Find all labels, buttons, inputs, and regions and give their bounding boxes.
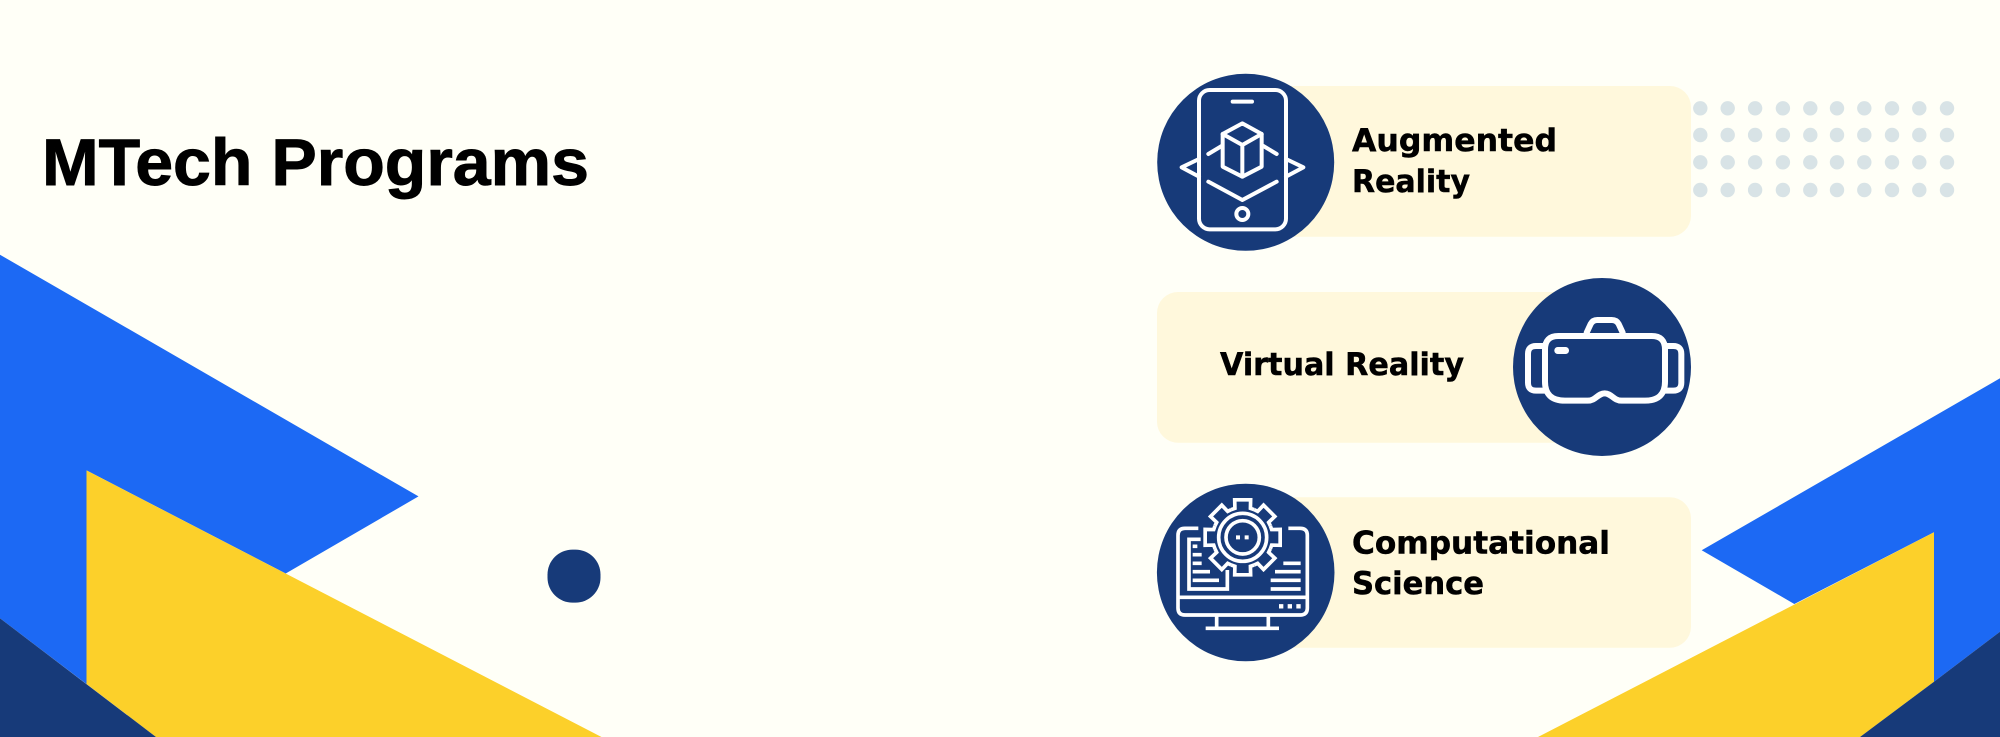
label: Augmented bbox=[1352, 123, 1557, 159]
card background bbox=[1157, 292, 1617, 443]
right geometric decoration bbox=[1538, 378, 2000, 737]
title: MTech Programs bbox=[42, 126, 589, 199]
card background bbox=[1245, 497, 1691, 648]
label: Computational bbox=[1352, 526, 1610, 562]
dot grid bbox=[1693, 101, 1954, 197]
panel: Virtual Reality bbox=[1157, 278, 1691, 456]
navy right corner bbox=[1860, 632, 2000, 737]
icon: VR headset bbox=[1528, 320, 1681, 401]
icon circle bbox=[1513, 278, 1691, 456]
navy left corner bbox=[0, 618, 156, 737]
yellow left triangle bbox=[86, 470, 602, 737]
panel: Augmented Reality bbox=[1157, 74, 1691, 251]
navy dot bbox=[548, 550, 600, 603]
icon circle bbox=[1157, 74, 1334, 251]
icon: monitor with gear bbox=[1178, 500, 1307, 628]
card background bbox=[1245, 86, 1691, 237]
panel: Computational Science bbox=[1157, 484, 1691, 661]
label: Reality bbox=[1352, 164, 1470, 200]
blue right shape bbox=[1702, 378, 2000, 682]
icon circle bbox=[1157, 484, 1334, 661]
left geometric decoration bbox=[0, 255, 602, 737]
label: Virtual Reality bbox=[1220, 347, 1464, 383]
blue left shape bbox=[0, 255, 418, 684]
label: Science bbox=[1352, 566, 1484, 602]
yellow right triangle bbox=[1538, 532, 1934, 737]
icon: AR phone with cube bbox=[1182, 90, 1303, 229]
